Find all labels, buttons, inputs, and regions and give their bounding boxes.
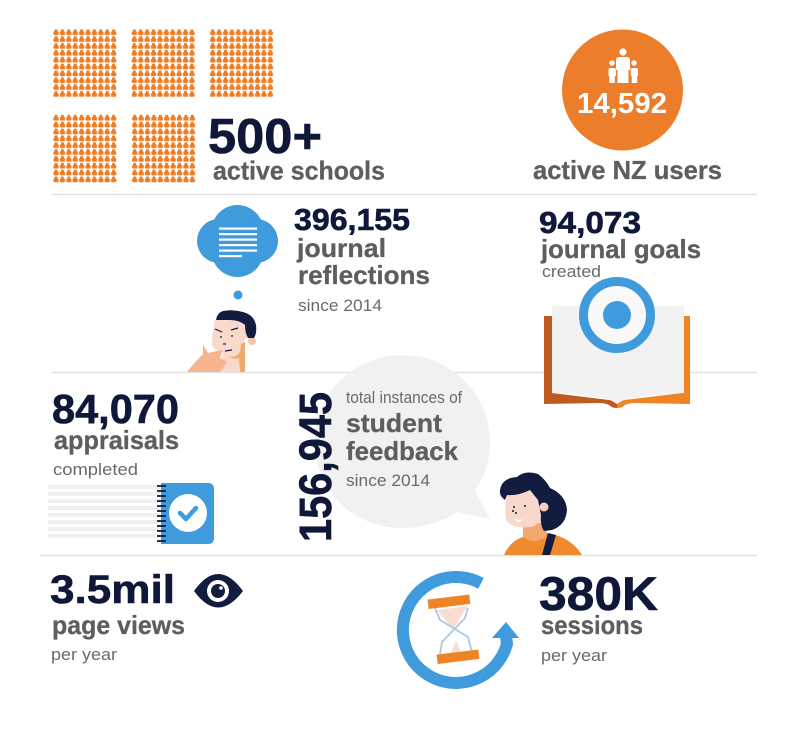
speech bubble [315, 355, 490, 528]
stat: appraisals: appraisals [54, 425, 179, 455]
stat: appraisals: completed [53, 460, 138, 479]
stat: journal reflections: 396,155 [294, 202, 410, 237]
stat: 500+ active schools: active schools [213, 156, 385, 186]
stat: journal goals: 94,073 [539, 205, 641, 240]
stat: student feedback: feedback [346, 436, 459, 466]
stat: journal reflections: since 2014 [298, 296, 382, 315]
stat: student feedback: 156,945 [290, 392, 341, 542]
illustration: thinking man [187, 310, 256, 372]
stat: journal goals: journal goals [540, 234, 701, 264]
stat: journal reflections: reflections [298, 260, 430, 290]
badge: active NZ users: active NZ users [533, 155, 722, 185]
icon: family [608, 48, 638, 83]
stat: sessions: per year [541, 646, 607, 665]
stat: journal goals [539, 205, 701, 281]
stat: 500+ active schools: 500+ [208, 110, 322, 164]
badge: active NZ users: 14,592 [577, 88, 667, 120]
stat: 500+ active schools [208, 110, 385, 186]
icon: notebook with check [48, 483, 214, 544]
stat: student feedback [290, 388, 462, 542]
icon: open book with target [544, 282, 690, 408]
stat: journal reflections [294, 202, 430, 315]
stat: student feedback: total instances of [346, 388, 462, 407]
icon grid: schools [53, 29, 274, 183]
stat: page views: per year [51, 645, 117, 664]
icon: thought cloud [197, 205, 278, 300]
stat: journal goals: created [542, 262, 601, 281]
stat: appraisals [52, 386, 179, 479]
stat: appraisals: 84,070 [52, 386, 179, 432]
stat: sessions: sessions [541, 610, 643, 640]
badge: active NZ users [533, 30, 722, 185]
stat: student feedback: since 2014 [346, 471, 430, 490]
stat: sessions: 380K [539, 567, 658, 620]
stat: student feedback: student [346, 408, 442, 438]
illustration: woman [500, 473, 582, 555]
stat: sessions [539, 567, 658, 665]
stat: page views [50, 568, 185, 664]
icon: eye [194, 574, 243, 608]
stat: journal reflections: journal [296, 233, 386, 263]
stat: page views: 3.5mil [50, 568, 175, 612]
icon: hourglass with circular arrow [403, 577, 519, 683]
stat: page views: page views [52, 610, 185, 640]
